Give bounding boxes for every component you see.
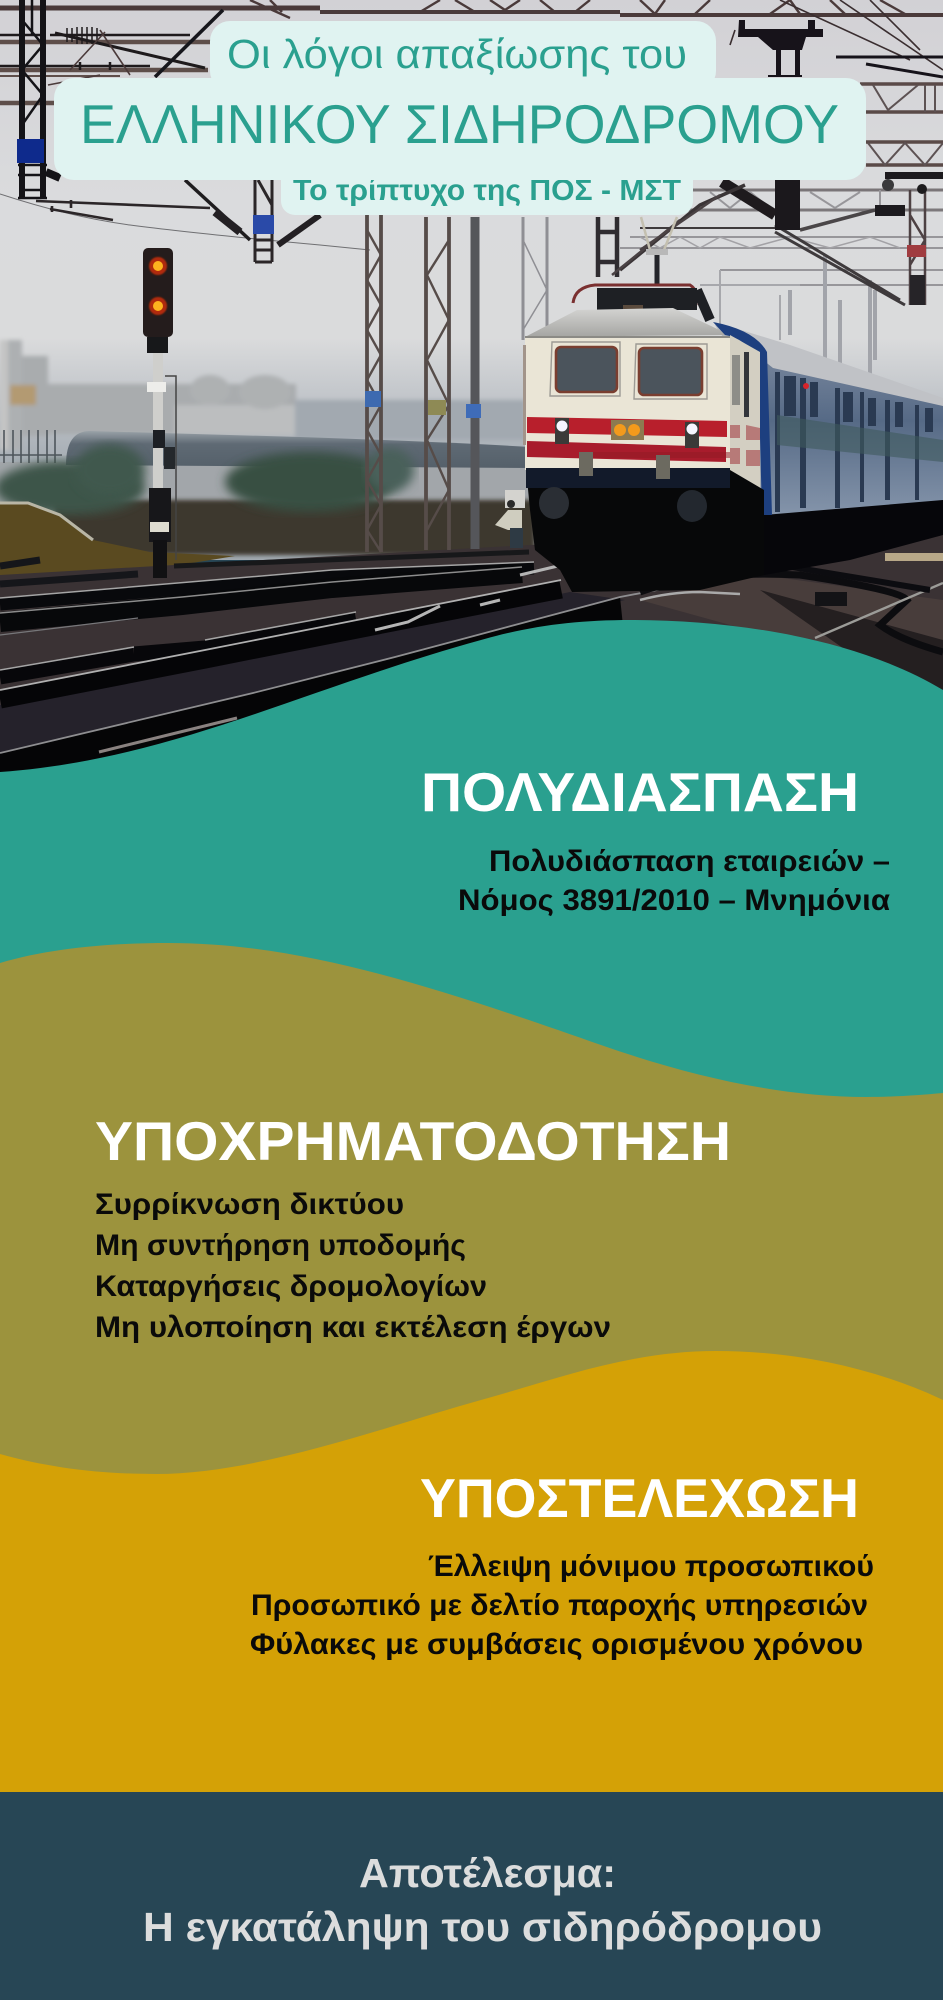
list: Καταργήσεις δρομολογίων (95, 1270, 487, 1303)
rails (0, 552, 943, 753)
ballast ground (0, 530, 943, 790)
subtitle pill (281, 165, 693, 215)
hanging structure top right (738, 20, 823, 76)
locomotive side (730, 335, 760, 490)
title top pill (210, 21, 716, 91)
list: Φύλακες με συμβάσεις ορισμένου χρόνου (250, 1628, 863, 1661)
panel: gold wave ΥΠΟΣΤΕΛΕΧΩΣΗ (0, 1351, 943, 1800)
carriages: background haze (715, 325, 729, 336)
list (250, 1550, 874, 1661)
right gantries and wires (611, 172, 943, 374)
train (523, 217, 943, 592)
distant curved building and wall (0, 430, 525, 468)
heading: ΥΠΟΧΡΗΜΑΤΟΔΟΤΗΣΗ (95, 1110, 731, 1172)
vegetation (0, 444, 535, 555)
pantograph (573, 217, 710, 330)
overhead gantries (0, 0, 943, 165)
list: Μη συντήρηση υποδομής (95, 1229, 466, 1262)
heading: ΠΟΛΥΔΙΑΣΠΑΣΗ (421, 761, 859, 823)
result text: Αποτέλεσμα: (359, 1850, 616, 1896)
title block (54, 21, 866, 215)
carriage side (760, 360, 943, 515)
list: Συρρίκνωση δικτύου (95, 1188, 404, 1221)
signal (143, 248, 176, 578)
description: Πολυδιάσπαση εταιρειών – (489, 845, 890, 878)
windows (556, 347, 617, 392)
lattice masts (365, 215, 617, 552)
list: Έλλειψη μόνιμου προσωπικού (428, 1550, 874, 1583)
locomotive cab (525, 337, 730, 470)
result text (143, 1850, 822, 1950)
panel: footer result (0, 1792, 943, 2000)
earth mound (0, 503, 235, 580)
title main pill: ΕΛΛΗΝΙΚΟΥ ΣΙΔΗΡΟΔΡΟΜΟΥ (80, 93, 839, 155)
title main pill (54, 78, 866, 180)
list (95, 1188, 611, 1344)
locomotive roof (525, 308, 730, 337)
list: Προσωπικό με δελτίο παροχής υπηρεσιών (251, 1589, 868, 1622)
panel: teal wave ΠΟΛΥΔΙΑΣΠΑΣΗ (0, 620, 943, 1200)
left mast (17, 0, 60, 198)
distant buildings (0, 340, 525, 450)
subtitle pill: Το τρίπτυχο της ΠΟΣ - ΜΣΤ (293, 174, 681, 207)
title top pill: Οι λόγοι απαξίωσης του (227, 31, 687, 77)
heading: ΥΠΟΣΤΕΛΕΧΩΣΗ (420, 1467, 859, 1529)
lower left gantry (36, 180, 320, 262)
red stripes (527, 417, 727, 437)
coupling hooks (579, 452, 670, 479)
catenary wire (0, 194, 370, 250)
person by the track (495, 490, 525, 548)
head lamps (555, 418, 699, 448)
panel: olive wave ΥΠΟΧΡΗΜΑΤΟΔΟΤΗΣΗ (0, 943, 943, 1500)
list: Μη υλοποίηση και εκτέλεση έργων (95, 1311, 611, 1344)
result text: Η εγκατάληψη του σιδηρόδρομου (143, 1904, 822, 1950)
undercarriage (526, 468, 764, 592)
description (458, 845, 891, 917)
carriage roof (715, 322, 943, 406)
description: Νόμος 3891/2010 – Μνημόνια (458, 884, 891, 917)
photo: train on misty railway (0, 0, 943, 790)
